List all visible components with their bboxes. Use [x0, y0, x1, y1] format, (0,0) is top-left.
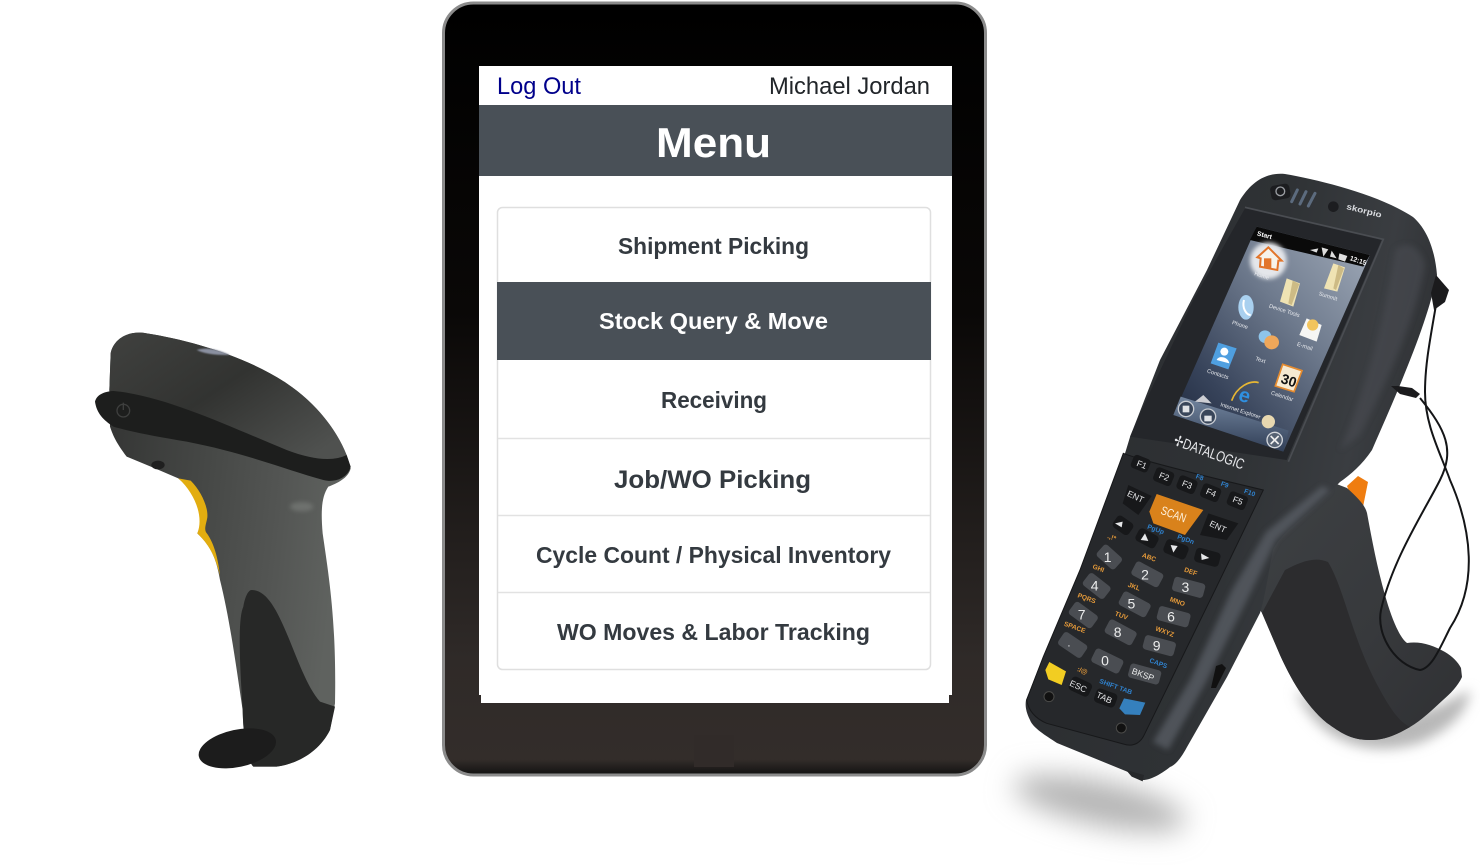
yellow trigger [178, 478, 220, 576]
number key labels [1067, 549, 1189, 683]
enter and navigation keys [1111, 485, 1238, 568]
function keys: F3 [1181, 478, 1194, 491]
status LEDs [1292, 190, 1315, 206]
function keys: F5 [1231, 494, 1245, 507]
body side highlight [1153, 486, 1330, 750]
power icon [117, 403, 130, 417]
orange alpha labels: PQRS [1076, 592, 1097, 606]
device body [1026, 174, 1437, 780]
blue function labels: F10 [1243, 488, 1256, 499]
row: stock query and move (active): Stock Query & Move [599, 308, 828, 334]
number key labels: . [1067, 638, 1071, 650]
speaker dots [1328, 201, 1339, 212]
scanner body [109, 333, 351, 767]
scan key: SCAN [1159, 503, 1188, 525]
function keys: F2 [1158, 470, 1171, 483]
device floor shadow [1009, 763, 1191, 843]
handle shaded panel [1262, 560, 1410, 740]
row: stock query and move (active) [497, 282, 931, 360]
row: receiving: Receiving [661, 387, 767, 413]
lanyard upper connector [1431, 275, 1449, 310]
function keys: F1 [1135, 458, 1149, 471]
grip highlight [290, 502, 313, 511]
folder icons: Device Tools [1268, 304, 1300, 319]
tablet home button [694, 735, 734, 767]
contacts icon [1206, 343, 1237, 381]
orange side trigger [1347, 476, 1368, 512]
orange alpha labels: ABC [1141, 552, 1157, 564]
yellow key [1045, 662, 1066, 685]
orange alpha labels: DEF [1183, 567, 1198, 578]
home icon: Home [1253, 271, 1270, 282]
orange alpha labels: TUV [1114, 611, 1129, 622]
enter key labels: ENT [1208, 518, 1229, 535]
orange alpha labels: MNO [1169, 596, 1186, 608]
text chat icon [1254, 330, 1279, 365]
esc and tab labels: TAB [1095, 690, 1114, 706]
number key labels: 2 [1141, 566, 1149, 582]
calendar icon [1270, 364, 1302, 403]
brand logo text: ✢DATALOGIC [1171, 433, 1247, 474]
barcode scanner (left) [95, 333, 351, 775]
bottom task bar [1173, 395, 1289, 452]
browser icon: e [1236, 384, 1253, 408]
number key labels: 3 [1181, 579, 1189, 595]
skorpio brand: skorpio [1346, 201, 1383, 220]
orange alpha labels: :/@ [1076, 666, 1089, 677]
calendar icon: 30 [1279, 370, 1299, 390]
list border [498, 208, 930, 670]
esc and tab labels: ESC [1068, 678, 1088, 695]
handheld mobile computer (right) [1009, 174, 1470, 843]
enter key labels [1126, 488, 1229, 535]
status bar: 12:15 [1349, 255, 1367, 267]
status bar: Start [1256, 231, 1273, 241]
function keys [1130, 454, 1249, 511]
upper face details [1130, 183, 1383, 474]
power button [1270, 183, 1291, 201]
number key labels: 4 [1091, 578, 1099, 594]
foot pad [195, 722, 280, 775]
orange alpha labels: JKL [1127, 582, 1141, 593]
orange alpha labels: SPACE [1063, 621, 1087, 635]
number key labels: 5 [1127, 596, 1135, 612]
browser icon [1219, 382, 1261, 421]
blue function labels: PgUp [1146, 524, 1165, 536]
status bar [1250, 227, 1370, 267]
scan key [1149, 494, 1203, 535]
number key labels: 0 [1101, 653, 1109, 669]
number key labels: 1 [1104, 549, 1112, 565]
display [1173, 227, 1370, 452]
number key labels: 8 [1114, 624, 1122, 640]
scanner black band [95, 391, 351, 481]
blue function labels: PgDn [1176, 534, 1195, 546]
side port [1211, 664, 1226, 688]
folder icons [1268, 263, 1345, 319]
calendar icon: Calendar [1270, 391, 1294, 403]
log out link: Log Out [497, 73, 581, 100]
phone icon [1231, 295, 1254, 331]
folder icons: Summit [1318, 291, 1338, 303]
orange alpha labels: WXYZ [1154, 626, 1175, 639]
email icon: E-mail [1296, 342, 1313, 353]
menu header band [479, 105, 952, 176]
number key labels: 6 [1167, 608, 1175, 624]
contacts icon: Contacts [1206, 369, 1229, 381]
number key labels: 7 [1078, 606, 1086, 622]
menu heading: Menu [656, 119, 771, 166]
row: cycle count: Cycle Count / Physical Inventory [536, 542, 891, 568]
scanner head highlight [197, 349, 230, 355]
scanner window dot [151, 461, 165, 469]
user name: Michael Jordan [769, 73, 930, 100]
dark grip inset [240, 590, 335, 767]
blue key [1119, 698, 1145, 715]
handle shadow [1295, 690, 1470, 749]
blue function labels [1098, 473, 1256, 696]
row: job/wo picking: Job/WO Picking [614, 466, 811, 494]
menu list [497, 208, 931, 670]
blue function labels: SHIFT TAB [1098, 678, 1133, 696]
number keys [1057, 543, 1206, 685]
tablet with menu [444, 3, 986, 775]
enter key labels: ENT [1126, 488, 1146, 505]
arrow glyphs [1115, 522, 1209, 560]
number key labels: BKSP [1130, 666, 1156, 683]
screen [479, 66, 952, 703]
blue function labels: F9 [1220, 481, 1230, 490]
phone icon: Phone [1231, 320, 1248, 331]
orange alpha labels: GHI [1091, 564, 1105, 574]
upper body shading [1340, 245, 1425, 450]
email icon [1296, 318, 1322, 353]
bottom connector [1126, 770, 1144, 781]
scanner head shell [109, 333, 347, 459]
home icon [1250, 242, 1287, 282]
screen bezel [1130, 208, 1382, 460]
orange alpha labels [1063, 533, 1198, 677]
row: wo moves: WO Moves & Labor Tracking [557, 619, 870, 645]
row: shipment picking: Shipment Picking [618, 233, 809, 259]
keypad panel [1027, 453, 1263, 745]
lanyard side connector [1391, 386, 1420, 398]
blue function labels: F8 [1195, 473, 1205, 483]
orange alpha labels: .,!* [1106, 533, 1117, 543]
blue function labels: CAPS [1148, 657, 1169, 671]
esc and tab labels [1068, 678, 1114, 706]
keypad [1027, 453, 1263, 781]
esc and tab keys [1067, 675, 1119, 709]
text chat icon: Text [1254, 356, 1267, 365]
bezel ridge [1245, 207, 1383, 462]
browser icon: Internet Explorer [1219, 402, 1261, 421]
tablet frame [444, 3, 986, 775]
lanyard cord [1380, 305, 1469, 670]
number key labels: 9 [1153, 637, 1161, 653]
keypad screws [1044, 692, 1126, 733]
function keys: F4 [1205, 486, 1218, 499]
pistol grip handle [1240, 470, 1462, 740]
